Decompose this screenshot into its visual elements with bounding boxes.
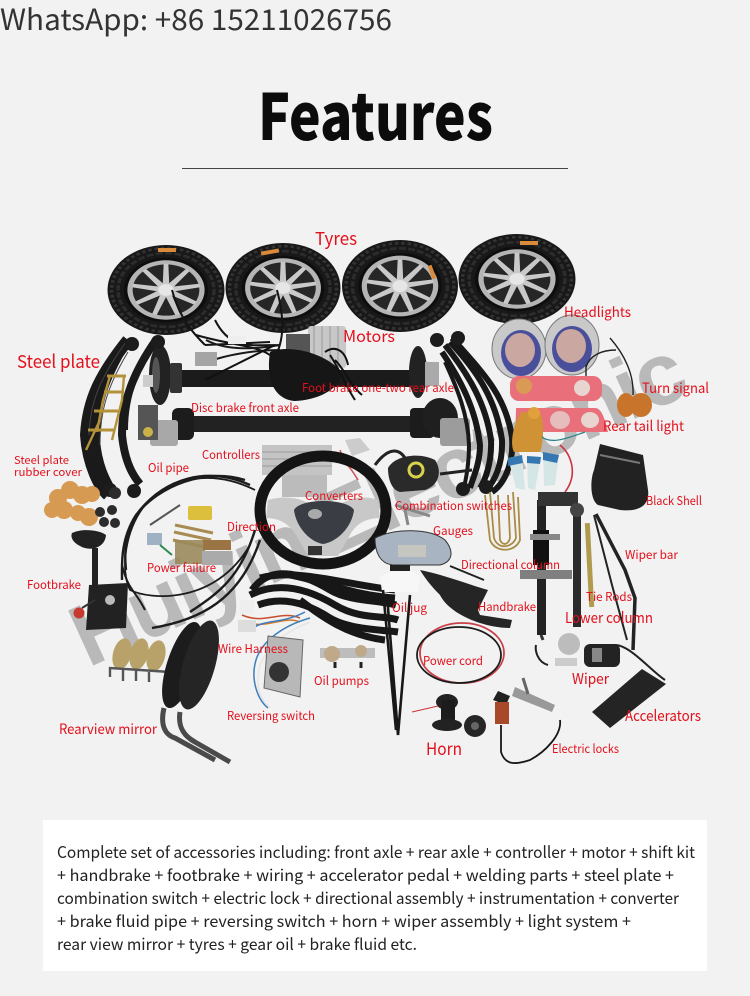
part labels: Direction	[227, 518, 276, 535]
part labels: Footbrake	[27, 576, 81, 593]
icon: gauges and oil jug	[375, 505, 484, 735]
title: Features	[258, 67, 493, 159]
part labels: Directional column	[461, 556, 560, 573]
part labels: Black Shell	[646, 492, 702, 509]
icon: gear oil bottle and tubes	[508, 407, 585, 492]
part labels: Electric locks	[552, 740, 619, 757]
part labels: Rear tail light	[603, 416, 685, 436]
icon: rearview mirror	[154, 616, 230, 762]
icon: tyres	[108, 234, 576, 335]
icon: rubber covers	[44, 481, 121, 528]
part labels: Oil pipe	[148, 459, 189, 476]
icon: directional column	[520, 492, 578, 640]
part labels: Converters	[305, 487, 363, 504]
part labels: Motors	[343, 323, 395, 347]
part labels: Wire Harness	[218, 640, 288, 657]
icon: electric lock	[493, 678, 560, 763]
icon: reversing switch	[264, 636, 303, 697]
icon: tail lights	[510, 376, 608, 432]
icon: wiper bar	[594, 514, 635, 650]
part labels: Power failure	[147, 559, 216, 576]
icon: black shell	[591, 444, 648, 510]
icon: brake cables	[122, 476, 260, 628]
icon: turn signals	[617, 393, 652, 417]
icon: left leaf springs	[86, 340, 156, 495]
icon: spring bushes	[103, 335, 165, 498]
part labels: Combination switches	[395, 497, 512, 514]
part labels: Turn signal	[642, 378, 709, 398]
parts illustration	[44, 234, 666, 763]
panel: accessories description: + handbrake + footbrake + wiring + accelerator pedal + welding parts + steel plate +	[57, 862, 674, 886]
part labels: Gauges	[433, 522, 473, 539]
panel: accessories description: Complete set of accessories including: front axle + rear axle + controller + motor + shift kit	[57, 839, 695, 863]
icon: lower column and tie rods	[570, 503, 594, 627]
part labels: Power cord	[423, 652, 483, 669]
part labels: Wiper bar	[625, 546, 678, 563]
icon: wire harness	[238, 574, 398, 708]
icon: right leaf springs	[430, 331, 512, 496]
panel: accessories description: + brake fluid pipe + reversing switch + horn + wiper assembly + light system +	[57, 908, 631, 932]
part labels: Oil jug	[392, 599, 427, 616]
part labels: Tie Rods	[586, 588, 632, 605]
icon: horn	[412, 694, 486, 737]
panel: accessories description: rear view mirror + tyres + gear oil + brake fluid etc.	[57, 931, 417, 955]
part labels: Disc brake front axle	[191, 399, 299, 416]
part labels: Controllers	[202, 446, 260, 463]
part labels: Wiper	[572, 668, 609, 689]
icon: rear axle and motor	[143, 290, 439, 405]
watermark: Huiyin Electronic	[55, 319, 701, 685]
part labels: Handbrake	[478, 598, 536, 615]
part labels: Lower column	[565, 607, 653, 628]
part labels: Steel plate	[17, 348, 100, 374]
icon: brackets	[109, 636, 170, 682]
icon: combination switch	[375, 451, 472, 492]
part labels: Reversing switch	[227, 707, 315, 724]
icon: accelerator pedal	[592, 669, 666, 728]
icon: front axle	[138, 398, 470, 446]
icon: wiper motor	[536, 633, 665, 680]
icon: u-bolts	[485, 492, 520, 550]
part labels: Tyres	[315, 225, 357, 251]
icon: bolts set	[147, 505, 232, 565]
icon: headlights	[492, 315, 633, 395]
part labels: Steel plate	[14, 452, 69, 468]
part labels: Rearview mirror	[59, 719, 158, 739]
part labels: rubber cover	[14, 464, 83, 480]
icon: oil pump	[320, 645, 375, 668]
panel: accessories description	[43, 820, 707, 971]
icon: handbrake	[420, 570, 512, 628]
part labels	[14, 225, 709, 760]
icon: steering wheel	[260, 456, 386, 564]
icon: controller and converter	[262, 438, 370, 497]
part labels: Headlights	[564, 302, 631, 322]
panel: accessories description: combination switch + electric lock + directional assembly + instrumentation + converter	[57, 885, 680, 909]
part labels: Horn	[426, 735, 462, 760]
part labels: Accelerators	[625, 705, 701, 726]
part labels: Foot brake one-two rear axle	[302, 379, 454, 396]
icon: foot brake pedal	[71, 530, 128, 630]
part labels: Oil pumps	[314, 672, 369, 689]
icon: power cord	[417, 623, 504, 683]
